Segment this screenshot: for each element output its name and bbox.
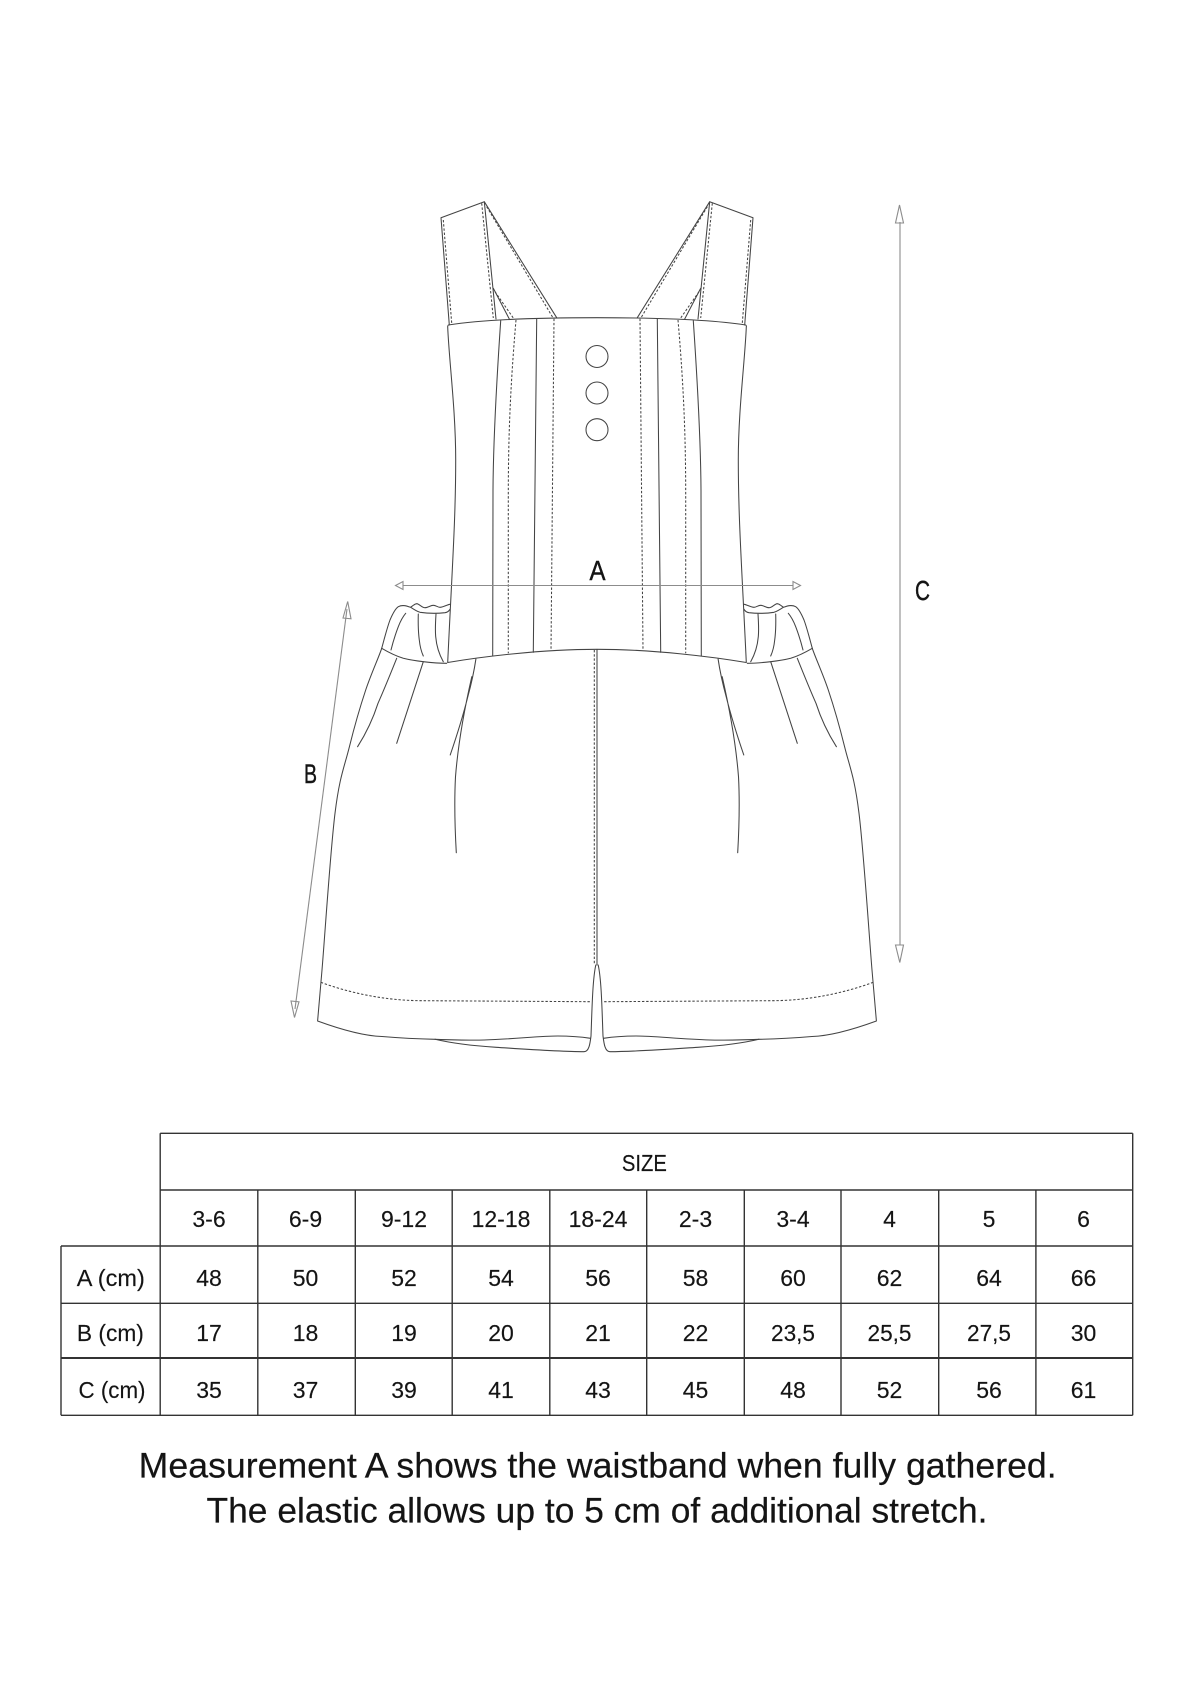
row B: 18 <box>293 1320 318 1346</box>
size labels row: 9-12 <box>381 1206 427 1232</box>
size table <box>61 1133 1133 1415</box>
row A: 48 <box>196 1265 222 1291</box>
bib panel outline <box>448 318 746 662</box>
row A: A (cm) <box>77 1265 145 1291</box>
size labels row: 3-4 <box>776 1206 810 1232</box>
arrow A: waist width <box>396 582 800 590</box>
row A: 52 <box>391 1265 417 1291</box>
label B: B <box>304 759 317 789</box>
row B: 21 <box>585 1320 611 1346</box>
measurement note <box>139 1446 1057 1531</box>
row B: 23,5 <box>771 1320 815 1346</box>
table grid <box>61 1133 1133 1415</box>
row A: 54 <box>488 1265 514 1291</box>
row A: 64 <box>976 1265 1002 1291</box>
size labels row: 6 <box>1077 1206 1090 1232</box>
size labels row: 5 <box>983 1206 995 1232</box>
size labels row: 12-18 <box>472 1206 530 1232</box>
row C: 56 <box>976 1377 1002 1403</box>
size labels row: 6-9 <box>289 1206 322 1232</box>
row C: 48 <box>780 1377 806 1403</box>
buttons <box>586 346 608 441</box>
right shorts leg <box>598 604 876 1052</box>
size labels row: 18-24 <box>569 1206 628 1232</box>
label C: C <box>915 575 930 606</box>
row C: 52 <box>877 1377 902 1403</box>
size labels row <box>192 1206 1090 1232</box>
row B: B (cm) <box>77 1320 144 1346</box>
row B: 22 <box>683 1320 708 1346</box>
row A: 66 <box>1071 1265 1096 1291</box>
left shorts leg <box>318 604 596 1052</box>
row C <box>78 1377 1096 1403</box>
row A: 58 <box>683 1265 708 1291</box>
size labels row: 4 <box>883 1206 896 1232</box>
measurement note: Measurement A shows the waistband when fully gathered. <box>139 1446 1057 1485</box>
arrow B: shorts length <box>291 602 351 1018</box>
row B: 20 <box>488 1320 514 1346</box>
left strap <box>441 202 557 325</box>
row B: 19 <box>391 1320 417 1346</box>
right strap <box>637 202 753 325</box>
row C: 37 <box>293 1377 318 1403</box>
row C: C (cm) <box>78 1377 146 1403</box>
row C: 45 <box>683 1377 708 1403</box>
garment technical drawing <box>318 202 876 1052</box>
row C: 41 <box>488 1377 514 1403</box>
row B: 17 <box>196 1320 222 1346</box>
label A: A <box>590 555 606 586</box>
row C: 61 <box>1071 1377 1096 1403</box>
row B: 27,5 <box>967 1320 1011 1346</box>
row C: 35 <box>196 1377 222 1403</box>
row A: 60 <box>780 1265 806 1291</box>
arrow C: total length <box>896 205 904 962</box>
row A: 62 <box>877 1265 902 1291</box>
row B <box>77 1320 1096 1346</box>
size labels row: 2-3 <box>679 1206 712 1232</box>
bib pleats right <box>640 319 701 656</box>
SIZE heading: SIZE <box>622 1150 667 1176</box>
row C: 39 <box>391 1377 417 1403</box>
row A: 50 <box>293 1265 318 1291</box>
row A: 56 <box>585 1265 611 1291</box>
measurement note: The elastic allows up to 5 cm of additional stretch. <box>206 1492 988 1531</box>
row B: 30 <box>1071 1320 1096 1346</box>
row A <box>77 1265 1096 1291</box>
centre front seam <box>594 650 597 965</box>
bib pleats left <box>493 319 554 656</box>
row B: 25,5 <box>868 1320 912 1346</box>
size labels row: 3-6 <box>192 1206 226 1232</box>
row C: 43 <box>585 1377 611 1403</box>
